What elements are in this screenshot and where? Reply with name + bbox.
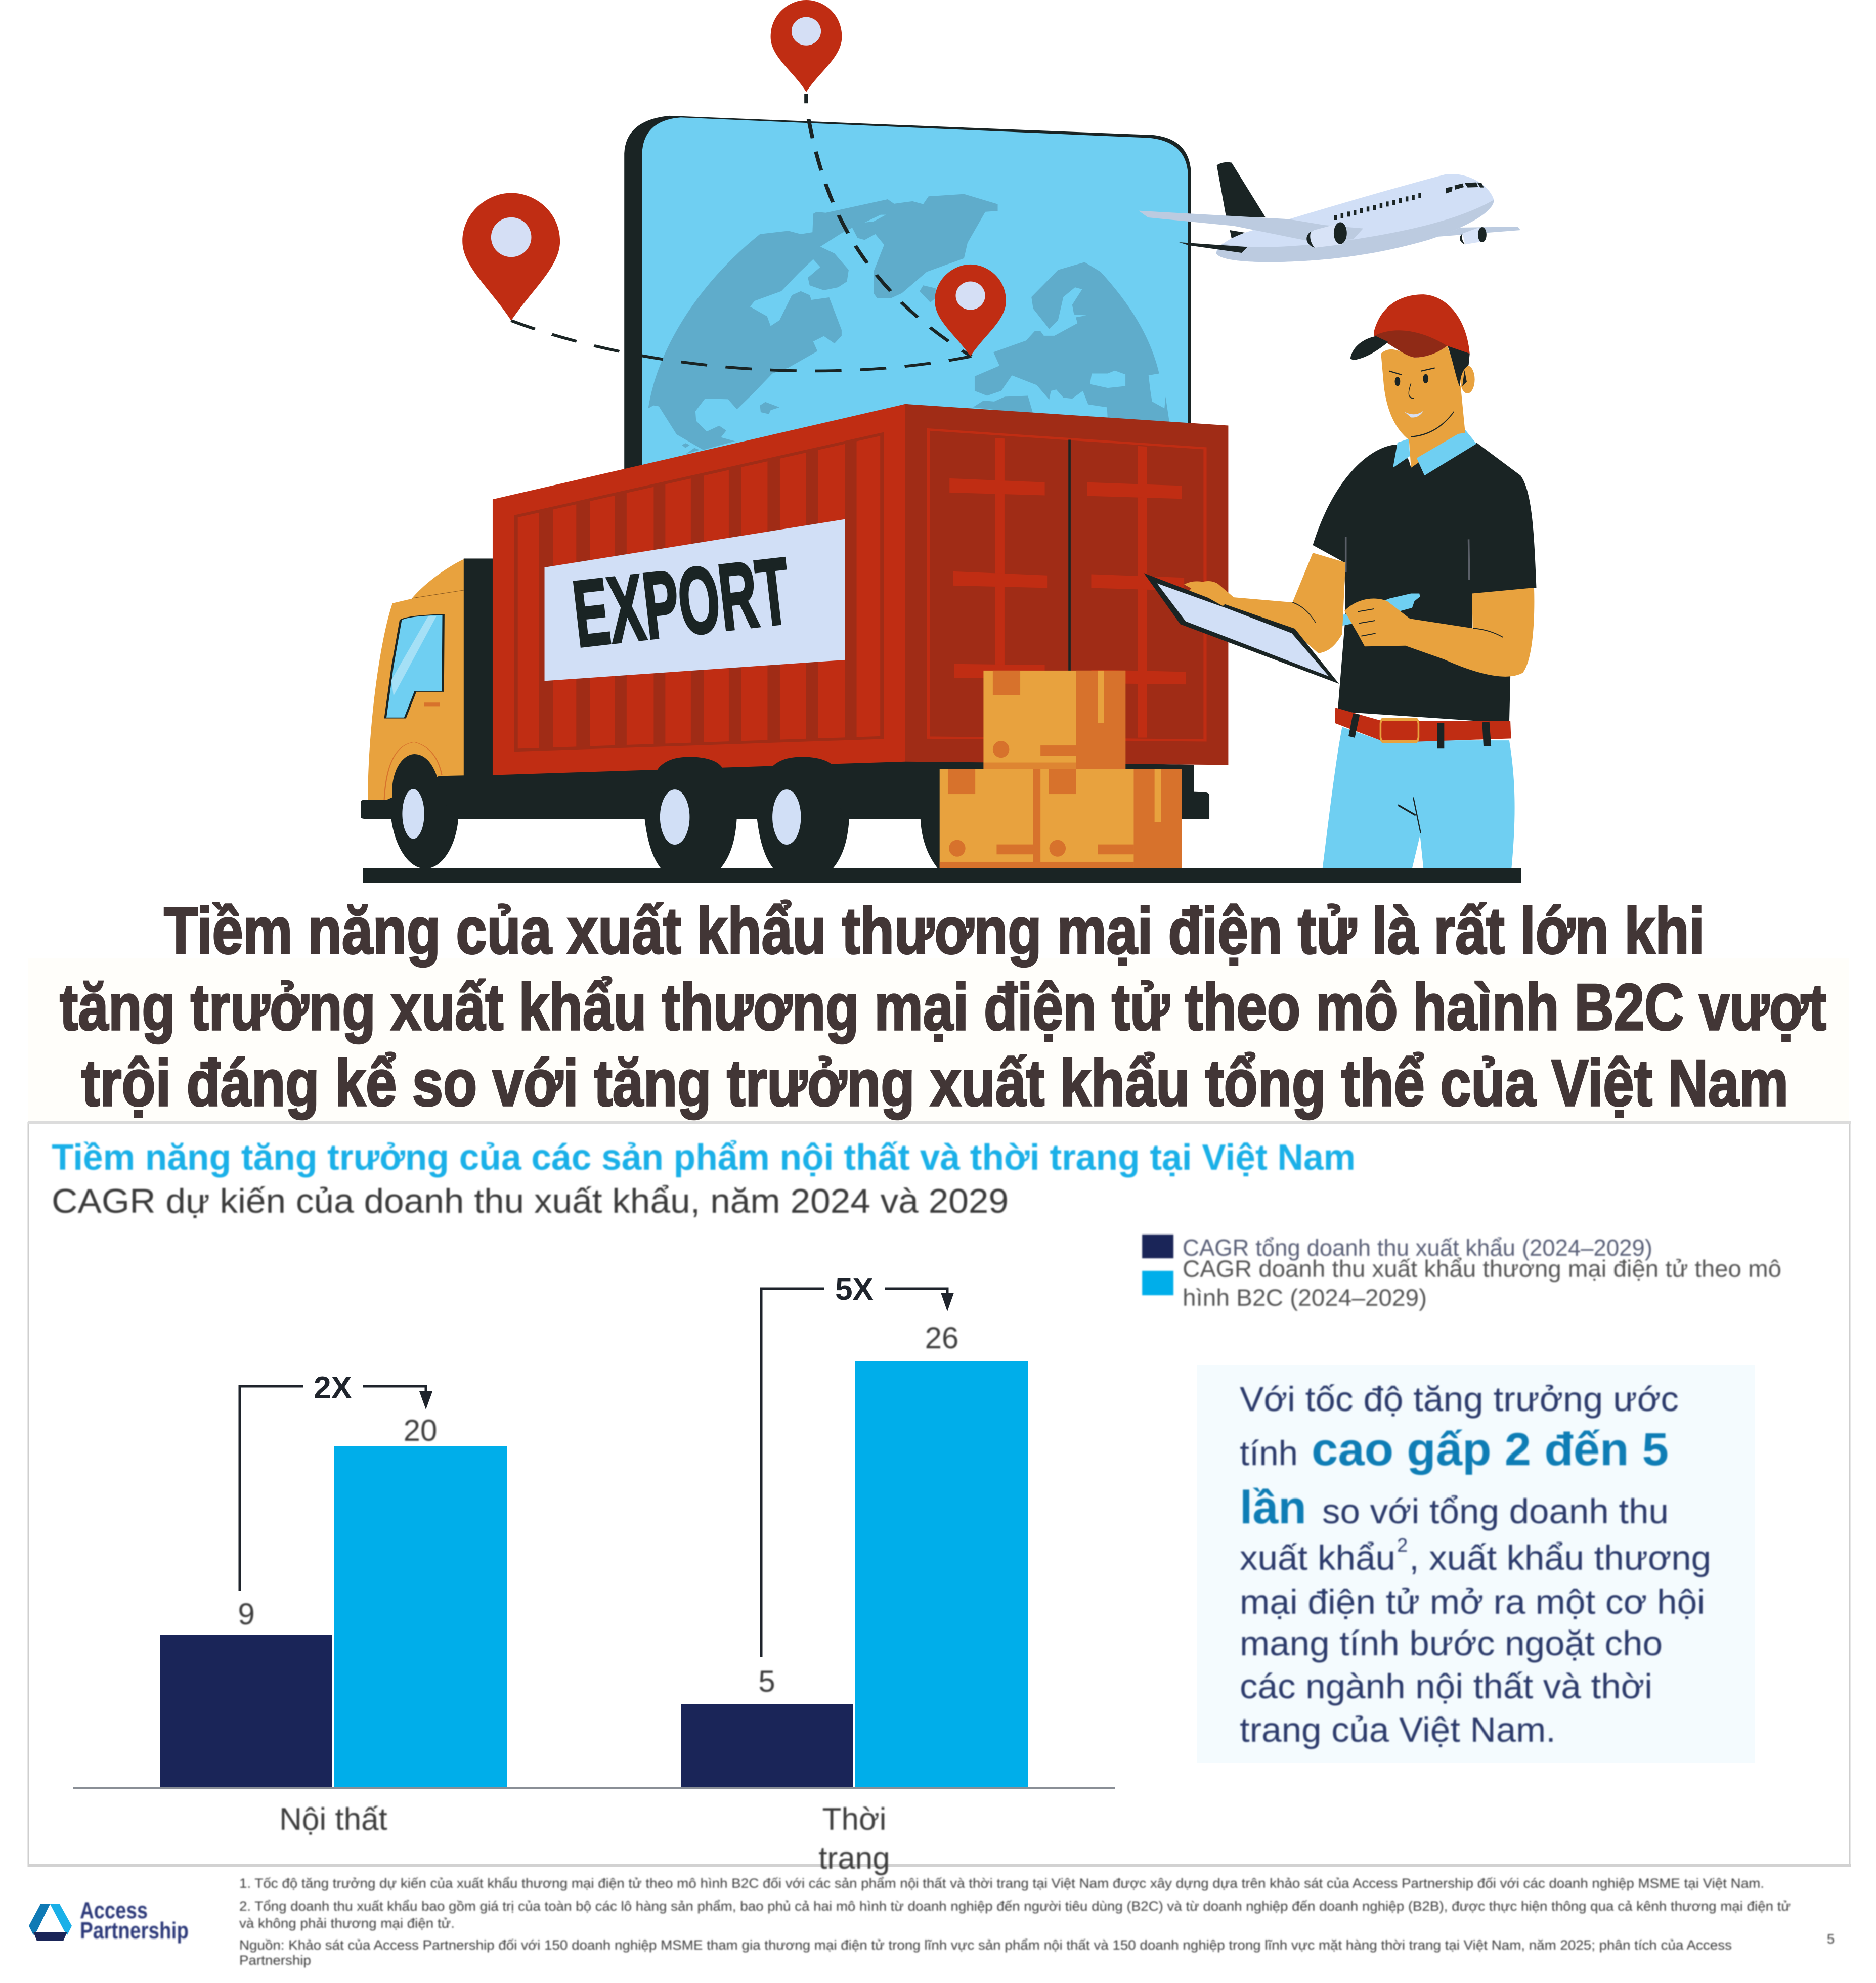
cardboard boxes — [940, 671, 1182, 869]
arrow: 5X comparison: 5X — [835, 1272, 874, 1307]
callout: growth summary: tính — [1240, 1434, 1298, 1473]
footnotes: 5 — [1827, 1931, 1835, 1947]
footnotes: Partnership — [239, 1953, 311, 1968]
value labels: 20 — [404, 1414, 437, 1447]
arrow: 2X comparison — [240, 1371, 432, 1591]
illustration: export truck, globe screen, plane, worker — [361, 0, 1536, 883]
value labels — [238, 1321, 958, 1698]
footnotes: và không phải thương mại điện tử. — [239, 1916, 455, 1931]
value labels: 9 — [238, 1597, 255, 1631]
chart heading: Tiềm năng tăng trưởng của các sản phẩm nội thất và thời trang tại Việt Nam — [52, 1137, 1356, 1178]
truck cab and chassis — [361, 558, 1209, 819]
callout: growth summary: mại điện tử mở ra một cơ hội — [1240, 1582, 1705, 1621]
truck wheels — [391, 754, 946, 868]
footnotes: 1. Tốc độ tăng trưởng dự kiến của xuất khẩu thương mại điện tử theo mô hình B2C đối với các sản phẩm nội thất và thời trang tại Việt Nam được xây dựng dựa trên khảo sát của Access Partnership đối với các doanh nghiệp MSME tại Việt Nam. — [239, 1876, 1764, 1891]
ground bar — [363, 868, 1521, 883]
location pins — [462, 0, 1006, 357]
callout: growth summary: các ngành nội thất và thời — [1240, 1667, 1652, 1706]
logo: Access Partnership: Partnership — [80, 1917, 189, 1944]
callout: growth summary: trang của Việt Nam. — [1240, 1710, 1556, 1749]
title band background — [28, 958, 1849, 1121]
callout: growth summary: Với tốc độ tăng trưởng ước — [1240, 1380, 1679, 1419]
dashed route lines — [511, 94, 971, 371]
bars: Thời trang — [681, 1361, 1028, 1787]
panel: chart card — [28, 1121, 1851, 1867]
airplane — [1139, 162, 1520, 262]
value labels: 26 — [925, 1321, 958, 1355]
callout: growth summary: mang tính bước ngoặt cho — [1240, 1624, 1663, 1663]
arrow: 2X comparison: 2X — [314, 1371, 352, 1405]
footnotes: 2. Tổng doanh thu xuất khẩu bao gồm giá trị của toàn bộ các lô hàng sản phẩm, bao phủ cả hai mô hình từ doanh nghiệp đến người tiêu dùng (B2C) và từ doanh nghiệp đến doanh nghiệp (B2B), được thực hiện thông qua cả kênh thương mại điện tử — [239, 1899, 1791, 1914]
legend: hình B2C (2024–2029) — [1183, 1284, 1427, 1311]
category labels: Nội thất — [279, 1802, 387, 1837]
legend: CAGR doanh thu xuất khẩu thương mại điện tử theo mô — [1183, 1255, 1781, 1282]
callout: growth summary: , xuất khẩu thương — [1409, 1538, 1711, 1577]
bars: Nội thất — [160, 1446, 507, 1787]
arrow: 5X comparison — [761, 1272, 954, 1657]
callout: growth summary — [1197, 1365, 1755, 1763]
shipping container — [493, 404, 1228, 775]
clipboard — [1144, 573, 1339, 684]
footnotes: Nguồn: Khảo sát của Access Partnership đối với 150 doanh nghiệp MSME tham gia thương mại điện tử trong lĩnh vực sản phẩm nội thất và 150 doanh nghiệp trong lĩnh vực mặt hàng thời trang tại Việt Nam, năm 2025; phân tích của Access — [239, 1937, 1732, 1953]
world map land masses — [648, 194, 1170, 454]
worker with clipboard — [1189, 294, 1536, 868]
footnotes — [239, 1876, 1835, 1968]
globe screen — [624, 116, 1191, 476]
callout: growth summary: 2 — [1397, 1535, 1408, 1556]
category labels: Thời — [822, 1802, 886, 1837]
logo: Access Partnership: Access — [80, 1897, 148, 1923]
main title — [60, 894, 1826, 1120]
EXPORT label: EXPORT — [568, 539, 795, 667]
callout: growth summary: cao gấp 2 đến 5 — [1312, 1424, 1669, 1475]
category labels — [279, 1802, 890, 1876]
callout: growth summary: xuất khẩu — [1240, 1538, 1395, 1577]
legend: CAGR tổng doanh thu xuất khẩu (2024–2029) — [1183, 1235, 1652, 1261]
value labels: 5 — [758, 1664, 775, 1698]
callout: growth summary: lần — [1240, 1482, 1306, 1533]
callout: growth summary: so với tổng doanh thu — [1322, 1492, 1669, 1531]
bar chart — [73, 1272, 1115, 1876]
chart heading — [52, 1137, 1356, 1220]
logo: Access Partnership — [29, 1897, 189, 1944]
legend — [1142, 1235, 1781, 1311]
category labels: trang — [818, 1841, 890, 1876]
chart heading: CAGR dự kiến của doanh thu xuất khẩu, năm 2024 và 2029 — [52, 1182, 1009, 1220]
